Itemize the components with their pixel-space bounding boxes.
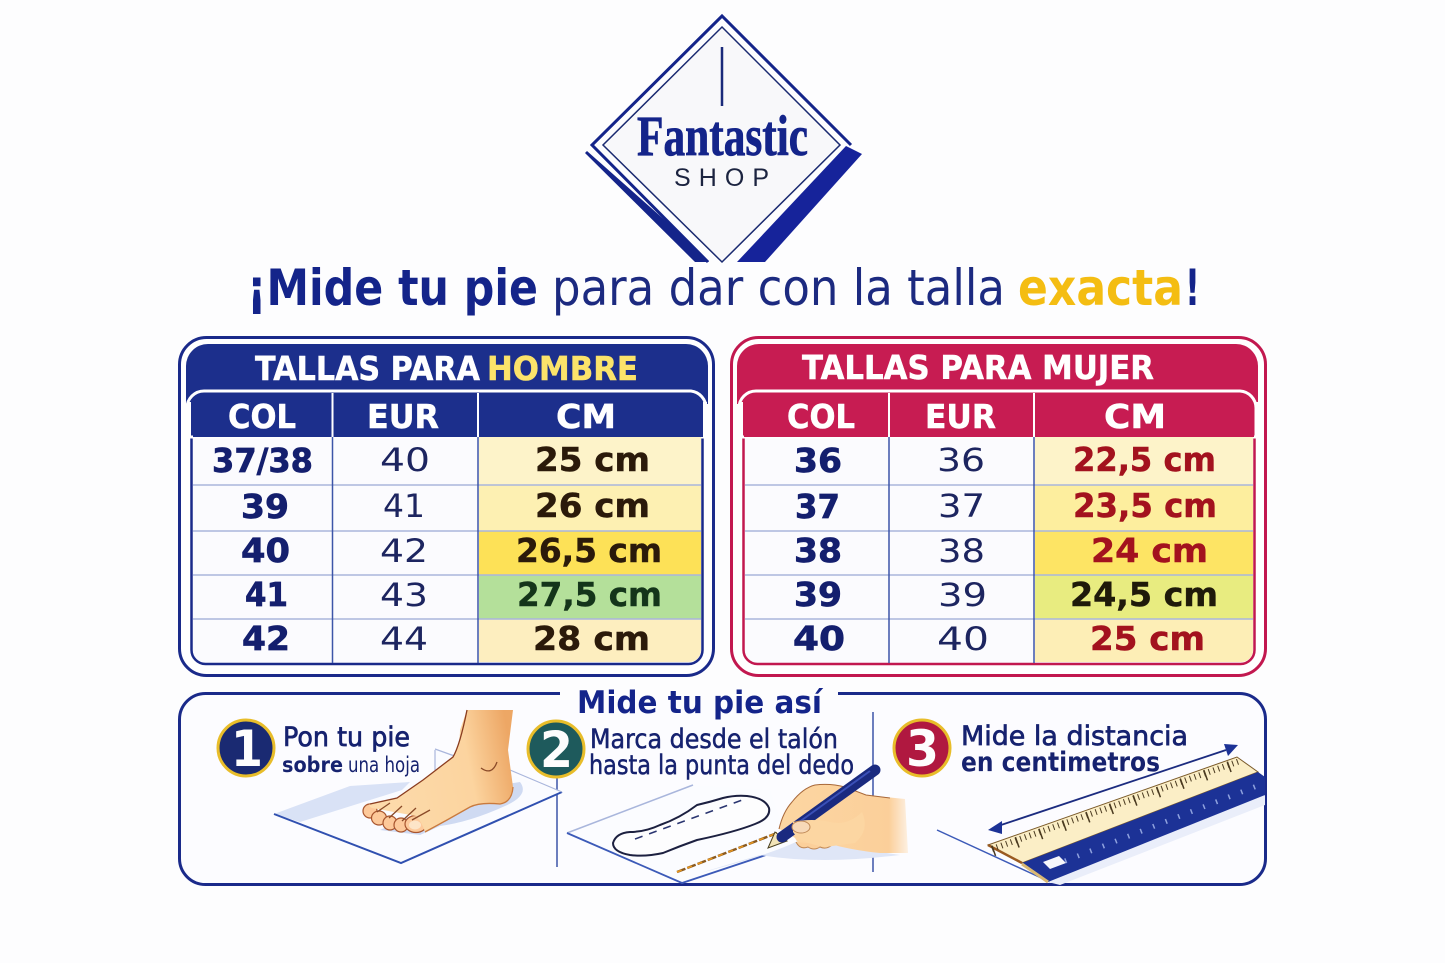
header band hombre xyxy=(186,344,708,404)
table mujer: 40 xyxy=(793,619,845,658)
heading: tallas para hombre: HOMBRE xyxy=(487,349,638,388)
table hombre: 28 cm xyxy=(533,619,650,658)
table hombre: 39 xyxy=(241,487,289,526)
panel: tallas para hombre xyxy=(180,338,714,676)
text: marca desde el talon: hasta la punta del dedo xyxy=(589,750,854,781)
table hombre: 42 xyxy=(380,532,428,570)
table mujer: 40 xyxy=(937,620,989,658)
text: mide la distancia: en centimetros xyxy=(961,747,1160,778)
heading: tallas para mujer: TALLAS PARA MUJER xyxy=(802,348,1154,387)
table mujer: 38 xyxy=(938,532,985,570)
table hombre: 26,5 cm xyxy=(516,531,662,570)
table hombre: EUR xyxy=(367,397,439,436)
table mujer: 23,5 cm xyxy=(1073,486,1217,525)
table hombre: 26 cm xyxy=(535,486,650,525)
table hombre: 44 xyxy=(380,620,428,658)
table mujer: 39 xyxy=(938,576,987,614)
text: mide la distancia xyxy=(961,721,1188,778)
table mujer: 36 xyxy=(937,441,985,479)
step 3 xyxy=(894,720,1265,885)
table mujer: COL xyxy=(787,397,855,436)
table mujer: 37 xyxy=(938,487,985,525)
table hombre: COL xyxy=(228,397,296,436)
table hombre: 25 cm xyxy=(535,440,650,479)
icon: number 3: 3 xyxy=(906,720,939,778)
text: pon tu pie: sobre xyxy=(282,753,343,777)
table mujer: EUR xyxy=(925,397,996,436)
table hombre xyxy=(187,391,707,664)
table mujer: 38 xyxy=(794,531,842,570)
icon: number 2 xyxy=(528,721,584,779)
text: pon tu pie xyxy=(282,722,420,777)
table mujer: 24,5 cm xyxy=(1070,575,1218,614)
panel: mide tu pie asi xyxy=(180,685,1266,885)
table hombre: 40 xyxy=(241,531,290,570)
header band mujer xyxy=(737,344,1258,404)
title: exacta xyxy=(1018,259,1183,317)
heading: tallas para hombre xyxy=(255,349,638,388)
illustration: ruler with arrow xyxy=(937,744,1265,885)
heading: tallas para hombre: TALLAS PARA xyxy=(255,349,480,388)
logo: Fantastic Shop diamond xyxy=(585,16,862,262)
text: pon tu pie: una hoja xyxy=(348,753,420,777)
title xyxy=(247,259,1200,317)
icon: number 2: 2 xyxy=(540,721,573,779)
icon: number 3 xyxy=(894,720,950,778)
table mujer: 36 xyxy=(794,441,842,480)
table mujer: 22,5 cm xyxy=(1073,440,1216,479)
step 2 xyxy=(528,721,908,883)
title: ! xyxy=(1185,259,1200,317)
logo: Fantastic Shop diamond: SHOP xyxy=(674,164,769,192)
panel: tallas para mujer xyxy=(732,338,1266,676)
table mujer xyxy=(739,391,1258,664)
logo: Fantastic Shop diamond: Fantastic xyxy=(637,105,808,168)
illustration: foot on sheet xyxy=(274,710,562,863)
table mujer: CM xyxy=(1104,397,1166,436)
table hombre: 41 xyxy=(383,487,425,525)
table hombre: 42 xyxy=(242,619,290,658)
table mujer: 39 xyxy=(794,575,842,614)
text: mide la distancia: Mide la distancia xyxy=(961,721,1188,752)
icon: number 1 xyxy=(218,720,274,778)
table hombre: 37/38 xyxy=(212,441,313,480)
step 1 xyxy=(218,710,562,863)
text: marca desde el talon xyxy=(589,724,854,781)
table hombre: 40 xyxy=(380,441,430,479)
table hombre: 27,5 cm xyxy=(517,575,662,614)
title: para dar con la talla xyxy=(552,259,1005,317)
table mujer: 25 cm xyxy=(1090,619,1205,658)
title: ¡Mide tu pie xyxy=(247,259,538,317)
table mujer: 37 xyxy=(795,487,840,526)
table hombre: 41 xyxy=(245,575,288,614)
text: pon tu pie: Pon tu pie xyxy=(283,722,410,753)
table hombre: 43 xyxy=(380,576,428,614)
text: marca desde el talon: Marca desde el talón xyxy=(590,724,838,755)
icon: number 1: 1 xyxy=(231,720,263,778)
table mujer: 24 cm xyxy=(1091,531,1208,570)
illustration: sheet with foot outline and pencil xyxy=(567,770,908,883)
table hombre: CM xyxy=(556,397,616,436)
heading: mide tu pie asi: Mide tu pie así xyxy=(577,685,823,721)
